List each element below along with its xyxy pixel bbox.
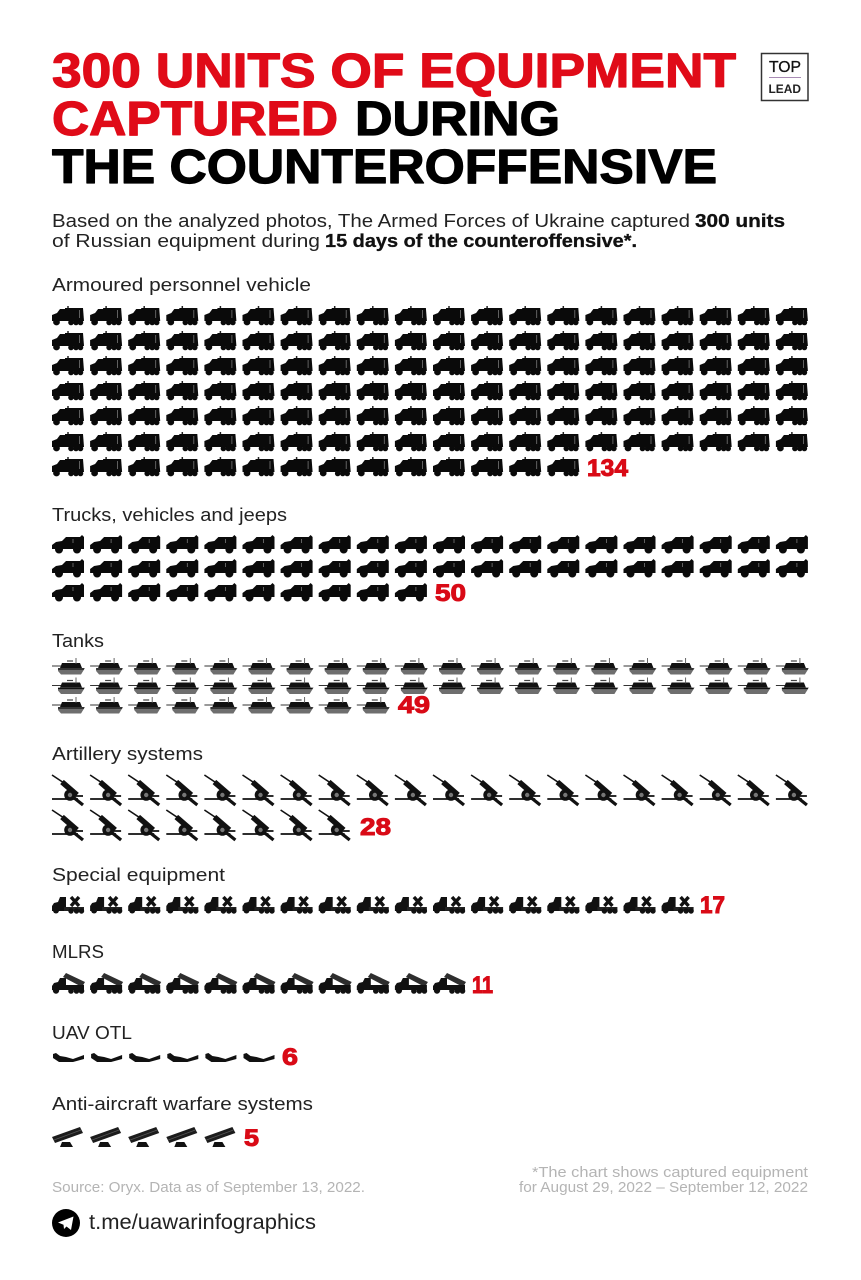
footnote [519, 1164, 809, 1196]
section: tanks [52, 631, 809, 719]
label: anti-aircraft warfare systems: Anti-aircraft warfare systems [52, 1094, 313, 1114]
value: 5: 5 [244, 1125, 259, 1152]
logo: Top Lead [762, 54, 808, 100]
value: 11: 11 [472, 972, 493, 999]
icons: armoured personnel vehicle [52, 306, 808, 476]
value: 134: 134 [587, 455, 629, 482]
icons: artillery systems [52, 775, 807, 840]
icons: anti-aircraft warfare systems [52, 1127, 235, 1147]
icons: UAV OTL [53, 1053, 274, 1062]
intro text [52, 211, 785, 251]
logo: Top Lead: LEAD [768, 82, 801, 96]
value: 49: 49 [398, 692, 430, 719]
icons: MLRS [52, 973, 466, 994]
section: artillery systems [52, 744, 807, 841]
value: 50: 50 [435, 580, 466, 607]
value: 6: 6 [282, 1044, 298, 1071]
icon: telegram [52, 1209, 80, 1237]
label: MLRS: MLRS [52, 942, 104, 962]
footnote: for August 29, 2022 – September 12, 2022 [519, 1179, 808, 1196]
title: CAPTURED [52, 93, 338, 146]
section: special equipment [52, 865, 725, 919]
title: THE COUNTEROFFENSIVE [52, 141, 717, 194]
section: armoured personnel vehicle [52, 275, 808, 482]
section: MLRS [52, 942, 493, 999]
title [52, 45, 736, 194]
icons: special equipment [52, 897, 694, 914]
value: 17: 17 [700, 892, 725, 919]
section: trucks, vehicles and jeeps [52, 505, 808, 607]
logo: Top Lead: TOP [769, 59, 801, 76]
source note: Source: Oryx. Data as of September 13, 2022. [52, 1179, 365, 1196]
intro text: of Russian equipment during [52, 231, 320, 251]
intro text: Based on the analyzed photos, The Armed Forces of Ukraine captured [52, 211, 690, 231]
telegram link: t.me/uawarinfographics [89, 1211, 316, 1234]
section: UAV OTL [52, 1023, 298, 1071]
label: tanks: Tanks [52, 631, 104, 651]
label: special equipment: Special equipment [52, 865, 225, 885]
intro text: 300 units [695, 211, 785, 231]
label: armoured personnel vehicle: Armoured personnel vehicle [52, 275, 311, 295]
title: 300 UNITS OF EQUIPMENT [52, 45, 736, 98]
footnote: *The chart shows captured equipment [532, 1164, 809, 1181]
icons: tanks [52, 658, 809, 714]
intro text: 15 days of the counteroffensive*. [325, 231, 637, 251]
section: anti-aircraft warfare systems [52, 1094, 313, 1152]
label: trucks, vehicles and jeeps: Trucks, vehicles and jeeps [52, 505, 287, 525]
label: artillery systems: Artillery systems [52, 744, 203, 764]
label: UAV OTL: UAV OTL [52, 1023, 132, 1043]
icons: trucks, vehicles and jeeps [52, 535, 808, 602]
title: DURING [355, 93, 560, 146]
value: 28: 28 [360, 814, 391, 841]
